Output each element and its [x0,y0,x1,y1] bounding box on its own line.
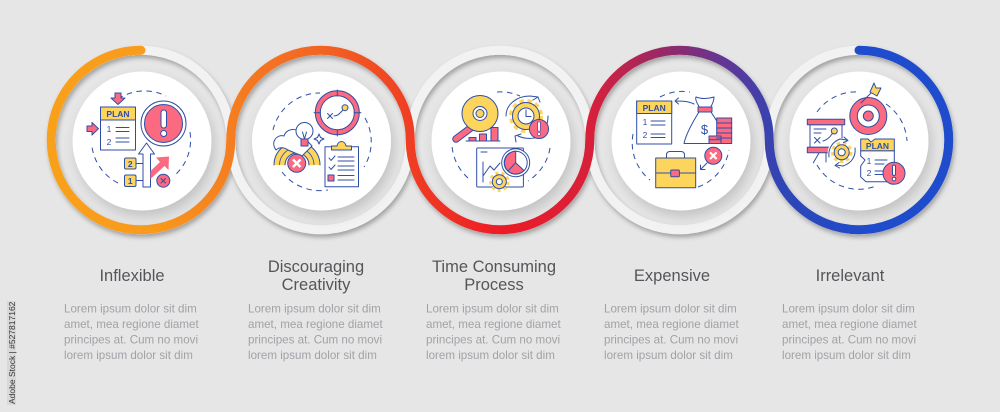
torn plan document: 2 [867,168,872,178]
column: discouraging creativity: principes at. Cum no movi [248,334,382,346]
arrows into plan [87,93,125,135]
plan document: 1 [643,117,648,127]
yellow arcs [274,142,320,165]
money bag: $ [701,122,709,137]
gear with arrows [828,137,856,168]
column: time consuming process: Time Consuming [432,258,556,276]
gradient serpentine line [51,50,949,230]
chart board with clock [477,148,530,190]
column: inflexible: amet, mea regione diamet [64,318,199,331]
column: expensive: Expensive [634,267,710,285]
plan document: 2 [643,130,648,140]
column: time consuming process: principes at. Cum no movi [426,334,560,346]
cloud and light bulb [274,122,324,156]
column: irrelevant: amet, mea regione diamet [782,318,917,331]
column: discouraging creativity: Discouraging [268,258,364,276]
up arrow with steps: 1 [128,176,133,186]
exclamation badge [141,101,186,146]
column: inflexible [64,267,199,362]
column: expensive: lorem ipsum dolor sit dim [604,349,733,362]
plan document: 1 [107,124,112,134]
briefcase [656,152,696,188]
icon: inflexible plan [87,91,191,187]
plan document [100,107,136,150]
plan document: 2 [107,137,112,147]
plan document [637,101,672,144]
column: inflexible: lorem ipsum dolor sit dim [64,349,193,362]
crosshair target [314,90,361,136]
clipboard [325,142,358,187]
bullseye with arrow [850,83,887,134]
alert badge [883,162,905,184]
stock id side label: Adobe Stock | #527817162 [7,301,17,404]
column: inflexible: principes at. Cum no movi [64,334,198,346]
column: discouraging creativity: Creativity [282,276,351,294]
bars [466,128,500,141]
column: time consuming process: lorem ipsum dolor sit dim [426,349,555,362]
column: time consuming process: Process [464,276,524,294]
column: time consuming process [426,258,561,362]
column: irrelevant: Lorem ipsum dolor sit dim [782,302,915,316]
icon: expensive [632,91,732,188]
up arrow with steps: 2 [128,159,133,169]
icon: discouraging creativity [273,90,371,191]
red diagonal arrow [150,156,169,179]
column: inflexible: Lorem ipsum dolor sit dim [64,302,197,316]
up arrow with steps [124,143,154,187]
column: expensive: Lorem ipsum dolor sit dim [604,302,737,316]
column: irrelevant: Irrelevant [816,267,885,285]
column: irrelevant [782,267,917,362]
torn plan document: PLAN [866,141,889,151]
column: inflexible: Inflexible [99,267,165,285]
column: discouraging creativity [248,258,383,362]
column: irrelevant: lorem ipsum dolor sit dim [782,349,911,362]
magnifying glass [456,96,498,139]
column: time consuming process: Lorem ipsum dolor sit dim [426,302,559,316]
white discs [72,72,928,210]
gear clock with arrows [506,96,548,142]
x badge [157,174,170,187]
column: time consuming process: amet, mea regione diamet [426,318,561,331]
column: discouraging creativity: amet, mea regione diamet [248,318,383,331]
arrow to plan [675,98,694,104]
torn plan document: 1 [867,156,872,166]
torn plan document [861,139,894,182]
presentation board [807,119,845,163]
grey ring tracks [51,50,949,230]
coin stacks [709,118,732,144]
column: expensive [604,267,739,362]
column: expensive: principes at. Cum no movi [604,334,738,346]
x badge [288,154,306,172]
plan document: PLAN [106,109,130,119]
column: discouraging creativity: lorem ipsum dolor sit dim [248,349,377,362]
column: discouraging creativity: Lorem ipsum dolor sit dim [248,302,381,316]
plan document: PLAN [643,103,666,113]
column: irrelevant: principes at. Cum no movi [782,334,916,346]
column: expensive: amet, mea regione diamet [604,318,739,331]
icon: irrelevant [807,83,907,189]
icon: time consuming process [452,92,550,190]
x badge with arrow [700,147,722,170]
